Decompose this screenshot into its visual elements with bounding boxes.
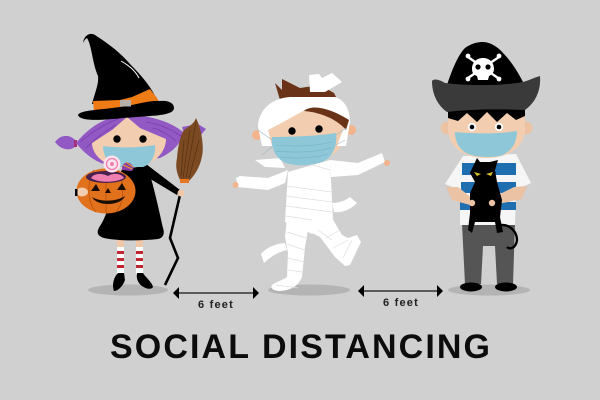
distance arrow right — [358, 285, 443, 309]
hat band — [93, 89, 160, 112]
pirate eyes — [468, 123, 503, 131]
witch arm — [146, 164, 180, 195]
witch pigtail right — [182, 124, 206, 140]
pirate hands on cat — [469, 200, 495, 206]
mummy legs — [271, 218, 361, 291]
witch eyes — [113, 135, 147, 143]
pirate face — [448, 108, 525, 158]
pirate shoes — [460, 282, 517, 292]
mummy ears — [252, 125, 356, 140]
broom stick — [165, 195, 180, 285]
mummy bandage bow — [309, 73, 342, 92]
pumpkin body — [76, 168, 136, 214]
witch hair — [76, 115, 184, 164]
candy — [91, 174, 124, 182]
skull and crossbones — [466, 54, 501, 81]
cat eyes — [474, 172, 493, 176]
lollipop — [104, 156, 120, 172]
witch dress — [98, 165, 164, 240]
pumpkin opening — [86, 171, 126, 183]
distance label right: 6 feet — [383, 297, 419, 309]
witch ground shadow — [88, 284, 168, 296]
cat tail — [500, 225, 517, 248]
mummy face mask — [272, 133, 336, 165]
mummy left arm — [236, 170, 288, 190]
broom head — [176, 118, 203, 183]
mummy fringe — [304, 108, 349, 130]
witch hand on broom — [178, 190, 184, 196]
witch pigtail left — [55, 136, 76, 149]
black cat — [468, 158, 517, 248]
mummy tail strip left — [261, 243, 287, 263]
witch hand on pumpkin — [76, 188, 88, 196]
pirate character — [432, 42, 540, 296]
mummy hair — [275, 79, 340, 105]
shirt stripes — [460, 163, 516, 210]
pirate hat brim — [432, 76, 540, 112]
pirate hair — [448, 108, 525, 122]
pirate face mask — [455, 131, 517, 157]
pumpkin face — [91, 183, 126, 204]
witch shoes — [113, 273, 153, 291]
witch legs — [117, 240, 143, 275]
mummy head wrap — [258, 97, 350, 146]
mummy tail strip right — [332, 197, 357, 212]
pirate ears — [440, 122, 532, 134]
mummy character — [232, 73, 390, 296]
mummy face — [266, 108, 348, 160]
pirate arms — [446, 186, 527, 205]
witch character — [55, 34, 206, 296]
pirate trousers — [462, 224, 515, 284]
mummy eyes — [288, 125, 323, 135]
loose bandage end — [255, 158, 285, 168]
hat buckle — [120, 100, 131, 106]
mask straps — [258, 128, 346, 155]
pirate ground shadow — [448, 284, 530, 296]
pirate hat crown — [447, 42, 524, 90]
mummy ground shadow — [268, 284, 350, 296]
mummy torso — [285, 160, 333, 234]
distance arrow left — [173, 287, 259, 311]
bandage lines — [252, 157, 376, 288]
witch face mask — [103, 145, 155, 167]
title: SOCIAL DISTANCING — [110, 328, 490, 366]
pumpkin with candy — [75, 156, 136, 214]
witch hat — [78, 34, 174, 120]
hat brim — [78, 101, 174, 120]
pirate shirt — [445, 154, 531, 225]
distance label left: 6 feet — [198, 299, 234, 311]
mummy right arm — [330, 153, 385, 177]
striped candy — [122, 163, 134, 171]
witch face — [92, 117, 166, 168]
